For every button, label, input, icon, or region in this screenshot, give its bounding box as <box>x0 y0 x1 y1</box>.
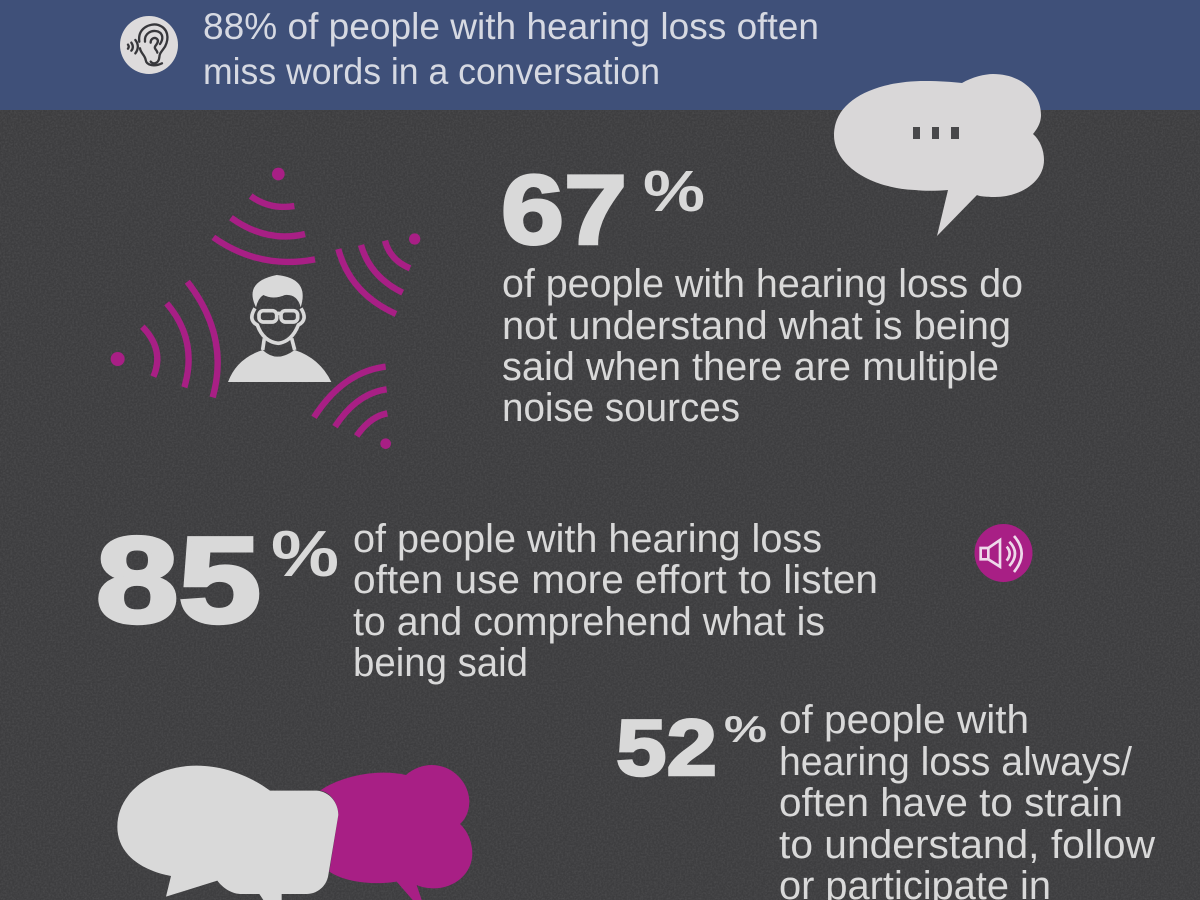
description: being said <box>353 641 528 685</box>
description: to understand, follow <box>779 823 1155 867</box>
description: noise sources <box>502 386 740 430</box>
percent sign: % <box>724 709 767 750</box>
icon: speaker <box>974 524 1032 582</box>
description: said when there are multiple <box>502 345 999 389</box>
icon: ear with sound waves <box>120 16 178 74</box>
description: of people with <box>779 698 1029 742</box>
percent sign: % <box>643 159 705 224</box>
noise waves: left <box>111 282 218 397</box>
description <box>779 698 1155 900</box>
banner text: miss words in a conversation <box>203 51 660 92</box>
icon: overlapping speech bubbles <box>117 765 472 900</box>
number 52: 52 <box>616 703 717 792</box>
stat: 67% <box>501 154 1023 430</box>
noise waves: right <box>338 233 420 314</box>
noise waves: top <box>213 168 315 262</box>
person with glasses <box>228 275 331 382</box>
description <box>502 262 1023 430</box>
description: not understand what is being <box>502 304 1011 348</box>
description: to and comprehend what is <box>353 600 825 644</box>
icon: person surrounded by noise sources <box>111 168 420 449</box>
icon: speech bubble with dots <box>834 74 1044 236</box>
banner text <box>203 6 819 92</box>
stat: 52% <box>616 698 1155 900</box>
description <box>353 517 878 685</box>
number 67: 67 <box>501 154 627 264</box>
percent sign: % <box>271 517 339 590</box>
top banner <box>0 0 1200 110</box>
description: often have to strain <box>779 781 1123 825</box>
description: often use more effort to listen <box>353 558 878 602</box>
noise waves: bottom <box>314 367 391 449</box>
description: of people with hearing loss <box>353 517 822 561</box>
stat: 85% <box>96 512 878 685</box>
description: of people with hearing loss do <box>502 262 1023 306</box>
banner text: 88% of people with hearing loss often <box>203 6 819 47</box>
number 85: 85 <box>96 512 261 648</box>
description: hearing loss always/ <box>779 740 1133 784</box>
